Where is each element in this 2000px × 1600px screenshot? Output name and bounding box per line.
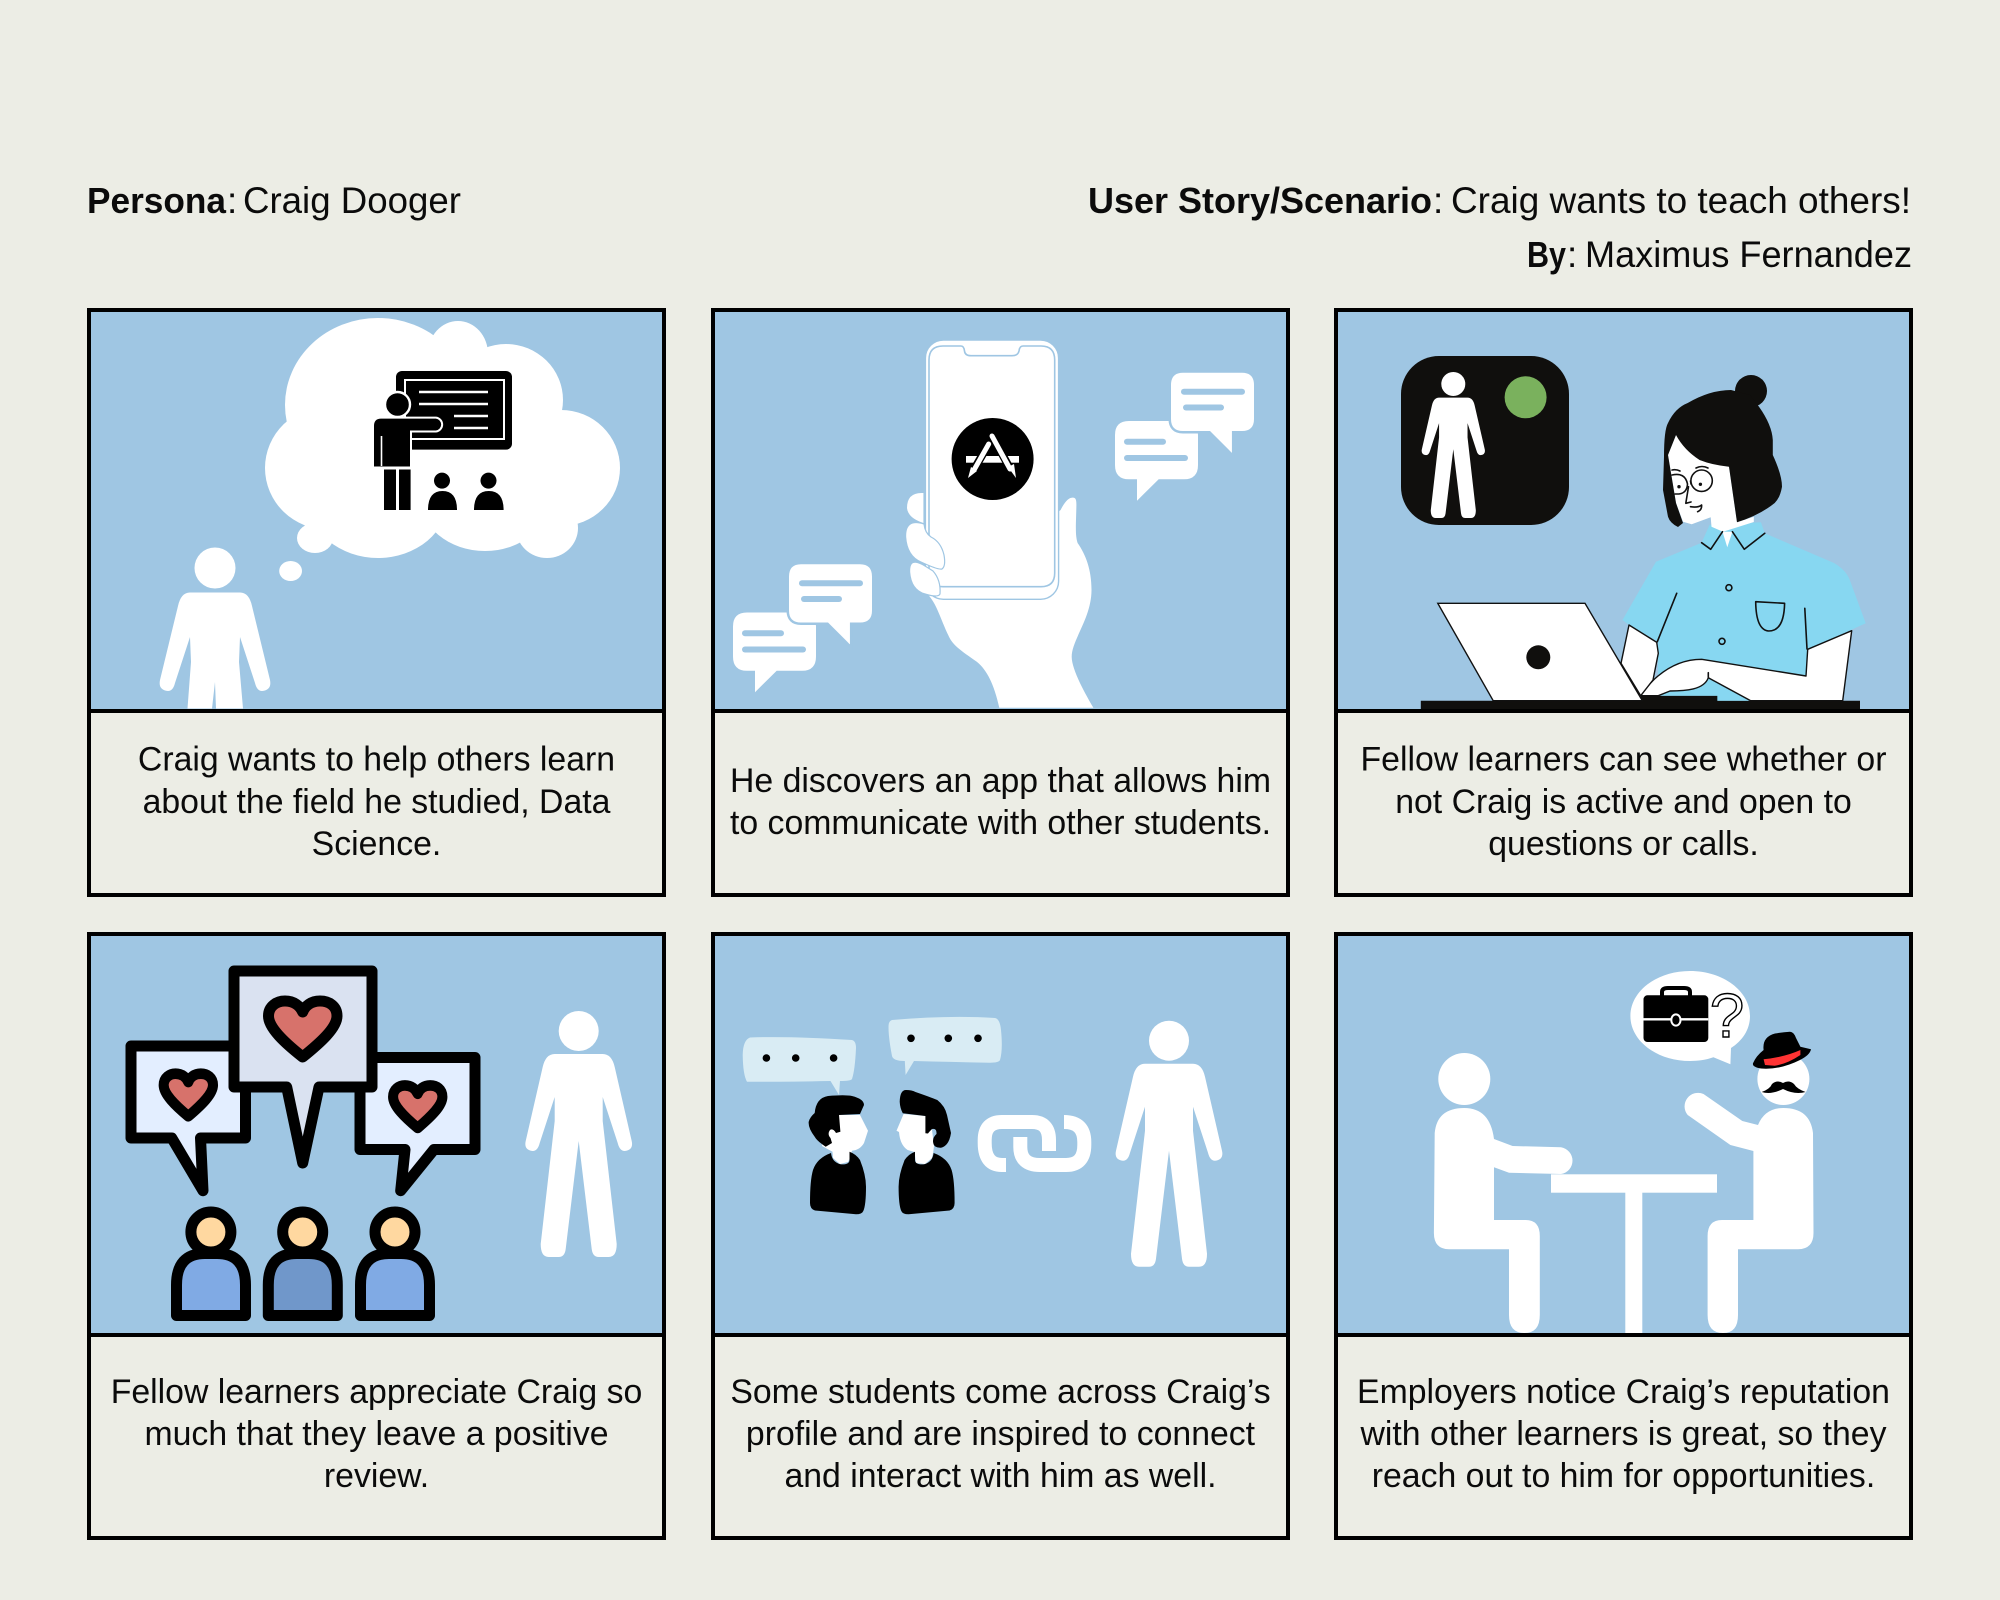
chat bubbles right — [1115, 373, 1254, 501]
header: user story: Craig wants to teach others! — [1451, 180, 1911, 221]
panel 2 caption — [730, 762, 1271, 842]
mustache — [1762, 1081, 1806, 1093]
seated person left — [1434, 1053, 1572, 1333]
shirt — [1622, 522, 1866, 701]
panel 1: Craig wants to help — [89, 310, 664, 895]
header: author: Maximus Fernandez — [1585, 234, 1912, 275]
student right — [896, 1090, 955, 1214]
panel 1 frame — [89, 310, 664, 895]
panel 4 caption: Fellow learners appreciate Craig so — [111, 1373, 642, 1411]
panel 5 picture background — [713, 934, 1288, 1335]
smartphone — [925, 340, 1059, 599]
panel 4 caption: review. — [324, 1457, 429, 1495]
panel 6 caption: reach out to him for opportunities. — [1372, 1457, 1875, 1495]
header: user story: : — [1433, 180, 1443, 221]
table — [1421, 696, 1860, 709]
panel 6 caption: with other learners is great, so they — [1360, 1415, 1887, 1453]
header: author: : — [1567, 234, 1577, 275]
panel 6: employers notice — [1336, 934, 1911, 1538]
panel 6 caption — [1357, 1373, 1890, 1495]
neck and face — [1668, 435, 1754, 532]
review hearts — [164, 1001, 442, 1128]
panel 1 caption box — [89, 711, 664, 895]
panel 3 caption box — [1336, 711, 1911, 895]
panel 3 caption: Fellow learners can see whether or — [1361, 740, 1886, 778]
panel 4: positive reviews — [89, 934, 664, 1538]
panel 2 caption: He discovers an app that allows him — [730, 762, 1271, 800]
panel 4 picture background — [89, 934, 664, 1335]
fingers — [906, 493, 945, 596]
hat — [1753, 1032, 1811, 1069]
panel 4 caption: much that they leave a positive — [144, 1415, 609, 1453]
header: user story — [1088, 180, 1911, 221]
header: user story: User Story/Scenario — [1088, 181, 1432, 221]
panel 5 frame — [713, 934, 1288, 1538]
woman at laptop — [1421, 375, 1866, 709]
review bubbles — [131, 971, 475, 1191]
icon: chain link — [985, 1122, 1084, 1165]
panel 5: students connect — [713, 934, 1288, 1538]
panel 5 caption: and interact with him as well. — [784, 1457, 1217, 1495]
left arm — [1621, 625, 1658, 696]
speech bubble — [1630, 971, 1750, 1064]
collar — [1702, 532, 1765, 549]
audience of three learners — [176, 1212, 430, 1316]
panel 1 caption — [138, 740, 615, 863]
panel 5 caption — [730, 1373, 1271, 1495]
thumb crease — [1707, 673, 1709, 678]
panel 4 frame — [89, 934, 664, 1538]
laptop — [1438, 603, 1642, 701]
panel 6 caption: Employers notice Craig’s reputation — [1357, 1373, 1890, 1411]
white person figure — [525, 1011, 632, 1257]
right arm — [1641, 631, 1852, 701]
icon: app store badge — [952, 418, 1034, 500]
hand holding phone — [927, 498, 1093, 708]
typing bubbles — [743, 1017, 1002, 1095]
panel 6 caption box — [1336, 1335, 1911, 1538]
table — [1551, 1174, 1717, 1333]
chat bubbles left — [733, 564, 872, 692]
header: persona: Craig Dooger — [243, 180, 461, 221]
panel 1 caption: Science. — [312, 825, 441, 863]
white person figure — [160, 548, 270, 708]
panel 5 caption: profile and are inspired to connect — [746, 1415, 1256, 1453]
panel 3 caption: questions or calls. — [1488, 825, 1759, 863]
thought cloud — [265, 318, 620, 581]
panel 3 caption — [1361, 740, 1886, 863]
panel 5 caption: Some students come across Craig’s — [730, 1373, 1271, 1411]
seated employer right — [1685, 1053, 1814, 1333]
icon: briefcase — [1644, 988, 1708, 1042]
panel 1 caption: about the field he studied, Data — [143, 783, 611, 821]
panel 1 caption: Craig wants to help others learn — [138, 740, 615, 778]
icon: teacher at blackboard — [373, 371, 512, 510]
panel 6 frame — [1336, 934, 1911, 1538]
panel 4 caption — [111, 1373, 642, 1495]
panel 2 caption: to communicate with other students. — [730, 804, 1271, 842]
glasses and facial features — [1672, 466, 1712, 512]
panel 3 picture background — [1336, 310, 1911, 711]
panel 5 caption box — [713, 1335, 1288, 1538]
shirt details — [1657, 585, 1807, 649]
panel 3: active status — [1336, 310, 1911, 895]
panel 2 picture background — [713, 310, 1288, 711]
panel 2 caption box — [713, 711, 1288, 895]
header: persona: : — [227, 180, 237, 221]
panel 3 caption: not Craig is active and open to — [1395, 783, 1852, 821]
panel 2 frame — [713, 310, 1288, 895]
panel 6 picture background — [1336, 934, 1911, 1335]
panel 4 caption box — [89, 1335, 664, 1538]
white person figure — [1116, 1021, 1222, 1267]
panel 2: discovers the app — [713, 310, 1288, 895]
header: persona: Persona — [87, 181, 227, 221]
status card — [1401, 356, 1569, 525]
header: persona — [87, 180, 461, 221]
student left — [809, 1095, 868, 1214]
hair — [1663, 375, 1782, 527]
panel 1 picture background — [89, 310, 664, 711]
header: author: By — [1527, 235, 1566, 275]
panel 3 frame — [1336, 310, 1911, 895]
question mark: ? — [1710, 982, 1744, 1051]
